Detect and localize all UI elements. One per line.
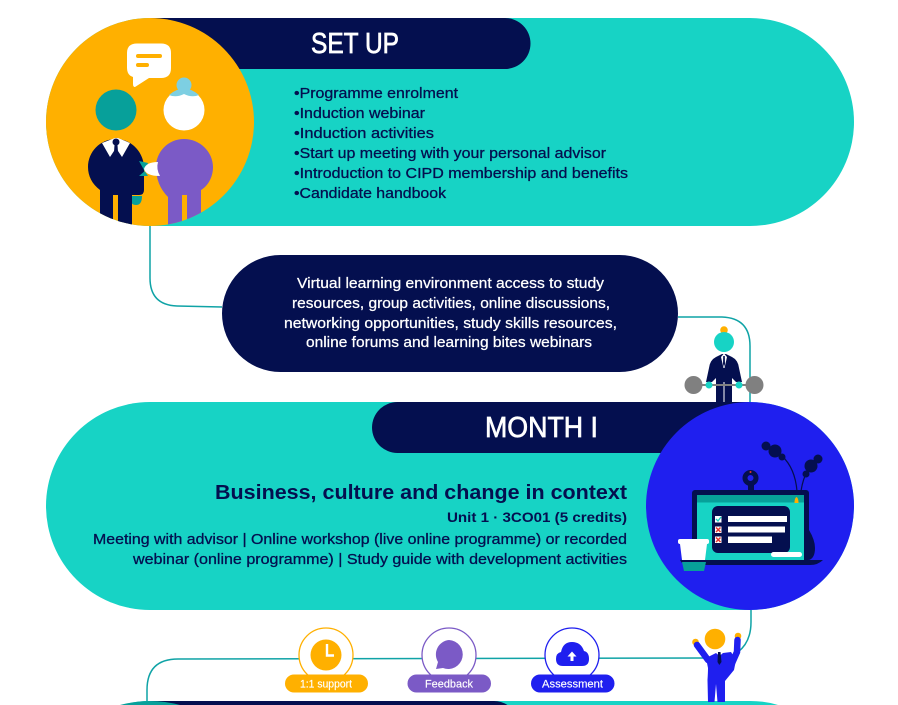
- icon: laptop with checklist: [646, 402, 854, 610]
- icon: person lifting barbell: [684, 326, 764, 402]
- heading: MONTH I: [485, 412, 598, 444]
- panel: virtual learning environment: [222, 255, 678, 372]
- badge: assessment: [531, 628, 614, 692]
- description text: networking opportunities, study skills resources,: [284, 316, 617, 332]
- description text: resources, group activities, online discussions,: [292, 296, 610, 312]
- webcam: [745, 471, 756, 492]
- handshake: [139, 161, 160, 176]
- bullet list: •Introduction to CIPD membership and benefits: [294, 165, 628, 182]
- panel: set up: [46, 18, 854, 226]
- bullet list: •Induction webinar: [294, 105, 425, 122]
- badge: feedback: [408, 628, 491, 692]
- laptop: [680, 490, 823, 565]
- bullet list: [294, 85, 628, 202]
- panel background: [46, 18, 854, 226]
- panel: next stage (cropped): [120, 701, 778, 705]
- description text: Virtual learning environment access to study: [297, 276, 605, 292]
- speech bubble: [127, 44, 171, 87]
- description text: [284, 276, 617, 351]
- header bar: [372, 402, 750, 453]
- coffee cup: [678, 539, 709, 571]
- woman: [156, 78, 213, 226]
- man: [88, 90, 144, 226]
- badge: 1:1 support: [285, 628, 368, 692]
- header bar: [150, 18, 530, 69]
- bullet list: •Start up meeting with your personal advisor: [294, 145, 606, 162]
- icon: two people shaking hands: [46, 18, 254, 226]
- badge: assessment: Assessment: [542, 678, 603, 690]
- plants: [762, 442, 822, 491]
- heading: SET UP: [311, 28, 399, 60]
- module details: webinar (online programme) | Study guide with development activities: [132, 551, 627, 568]
- module details: [93, 531, 627, 568]
- connector lines: [147, 226, 751, 701]
- module title: Business, culture and change in context: [215, 482, 627, 504]
- bullet list: •Induction activities: [294, 125, 434, 142]
- unit reference: Unit 1 · 3CO01 (5 credits): [447, 509, 627, 525]
- module details: Meeting with advisor | Online workshop (live online programme) or recorded: [93, 531, 627, 548]
- panel: month 1: [46, 402, 854, 610]
- icon: person celebrating: [692, 629, 741, 702]
- badge: 1:1 support: 1:1 support: [300, 678, 352, 690]
- badge: feedback: Feedback: [425, 678, 473, 690]
- bullet list: •Candidate handbook: [294, 185, 447, 202]
- panel background: [46, 402, 854, 610]
- bullet list: •Programme enrolment: [294, 85, 459, 102]
- description text: online forums and learning bites webinars: [306, 335, 592, 351]
